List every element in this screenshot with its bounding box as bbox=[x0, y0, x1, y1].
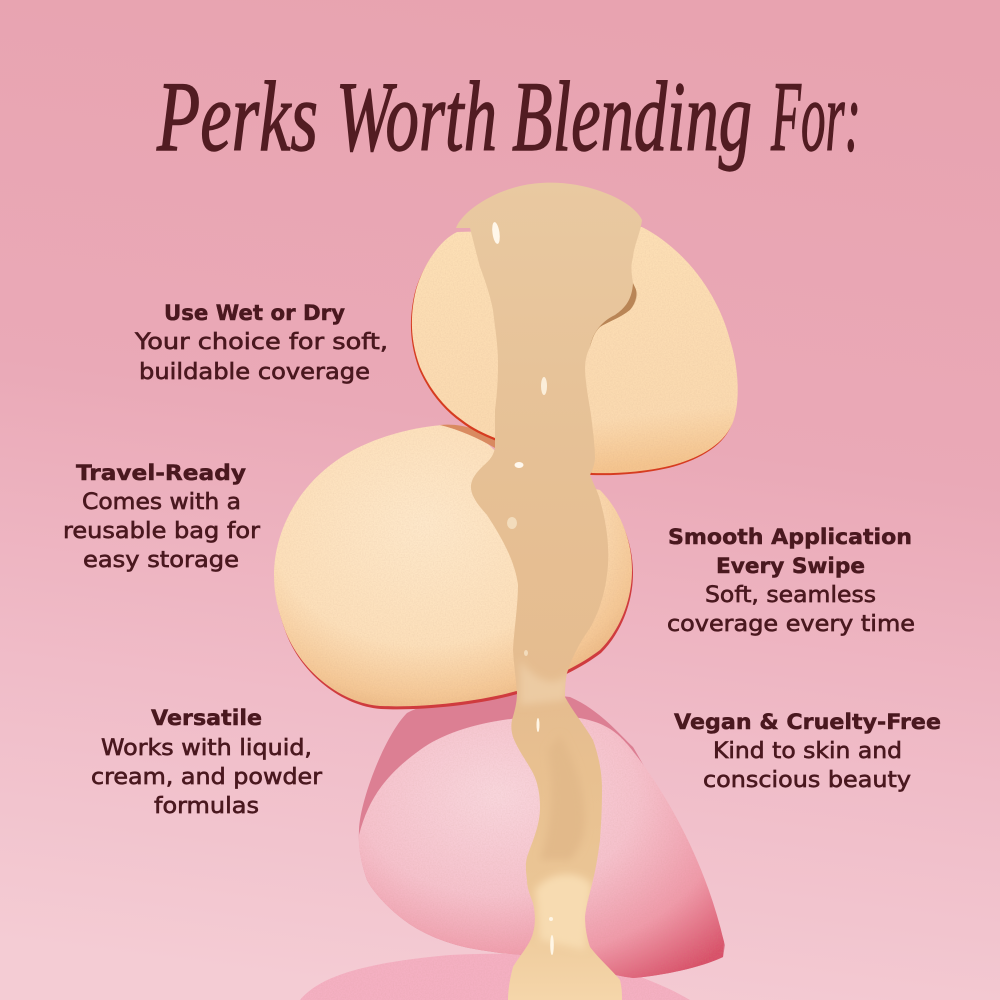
text block: use wet or dry bbox=[134, 301, 388, 385]
text block: versatile: Works with liquid, bbox=[101, 736, 312, 761]
top peach sponge bbox=[411, 227, 738, 475]
text block: travel-ready: Travel-Ready bbox=[76, 461, 246, 486]
text block: smooth application bbox=[667, 525, 915, 637]
sponge stack illustration bbox=[274, 183, 738, 1000]
text block: versatile: formulas bbox=[154, 794, 259, 819]
text block: vegan and cruelty-free: Vegan & Cruelty-Free bbox=[674, 710, 941, 735]
text block: smooth application: coverage every time bbox=[667, 612, 915, 637]
pink base sponge bbox=[300, 954, 690, 1000]
text block: smooth application: Soft, seamless bbox=[705, 583, 876, 608]
title: Blending bbox=[512, 61, 752, 172]
text block: versatile: Versatile bbox=[151, 706, 262, 731]
text block: vegan and cruelty-free bbox=[674, 710, 941, 793]
text block: vegan and cruelty-free: Kind to skin and bbox=[713, 739, 902, 764]
foundation drip bbox=[456, 183, 642, 1000]
text block: smooth application: Smooth Application bbox=[668, 525, 912, 550]
title bbox=[156, 61, 861, 172]
text block: use wet or dry: Your choice for soft, bbox=[134, 330, 388, 355]
foundation shading bbox=[520, 283, 636, 950]
text block: use wet or dry: Use Wet or Dry bbox=[164, 301, 345, 326]
text block: vegan and cruelty-free: conscious beauty bbox=[703, 768, 911, 793]
text block: travel-ready: easy storage bbox=[83, 548, 239, 573]
middle peach sponge bbox=[274, 425, 633, 709]
text block: travel-ready bbox=[63, 461, 261, 573]
text: For: bbox=[771, 61, 861, 172]
bottom pink sponge bbox=[359, 694, 725, 978]
text block: travel-ready: Comes with a bbox=[82, 490, 241, 515]
text block: travel-ready: reusable bag for bbox=[63, 519, 261, 544]
foundation highlights bbox=[491, 222, 501, 244]
text block: versatile bbox=[91, 706, 323, 819]
text block: smooth application: Every Swipe bbox=[716, 554, 865, 579]
title: Perks bbox=[156, 61, 318, 172]
text block: versatile: cream, and powder bbox=[91, 765, 323, 790]
text block: use wet or dry: buildable coverage bbox=[139, 360, 370, 385]
title: Worth bbox=[336, 61, 497, 172]
